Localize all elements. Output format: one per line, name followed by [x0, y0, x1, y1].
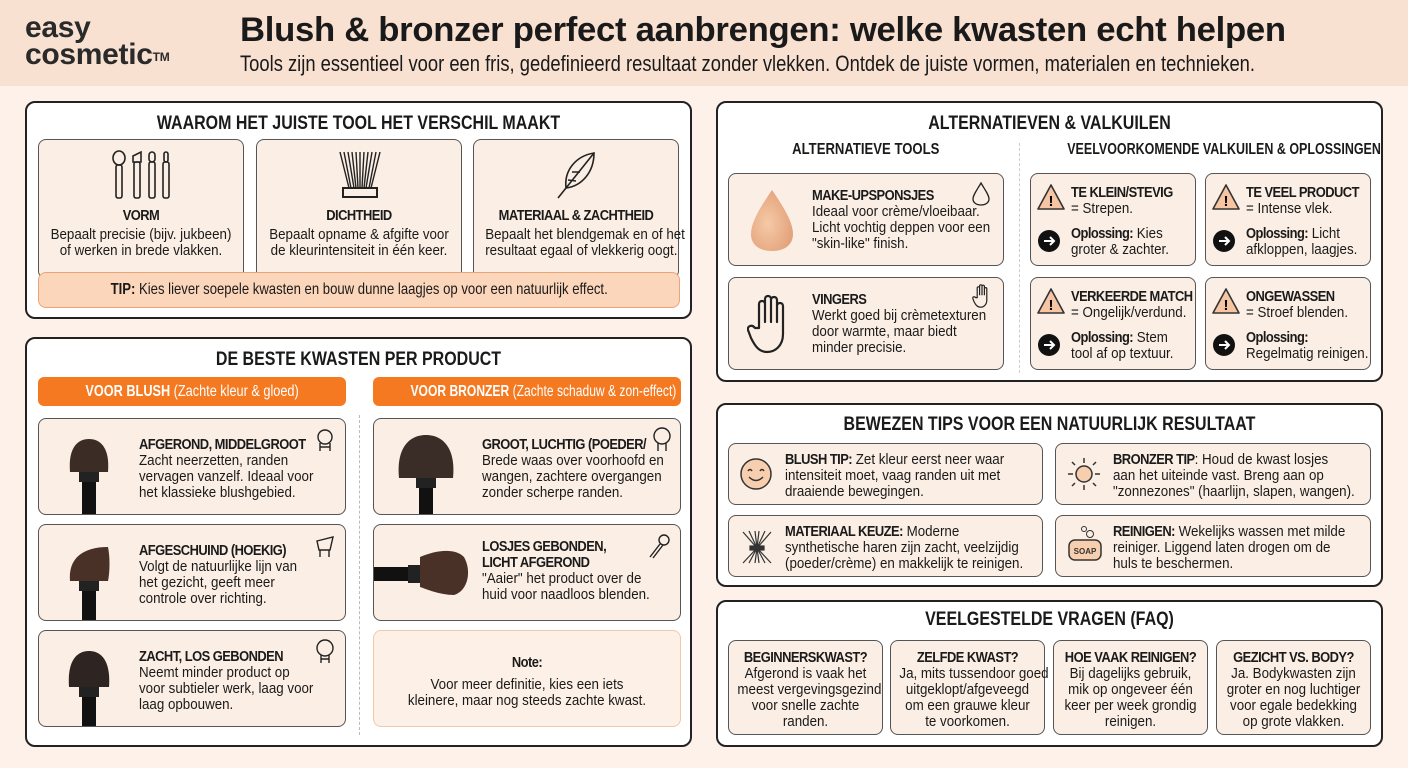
faq: gezicht vs body: voor egale bedekking: [1230, 697, 1357, 714]
faq: beginnerskwast: BEGINNERSKWAST?: [744, 650, 867, 666]
card: afgeschuind: Volgt de natuurlijke lijn van: [139, 558, 297, 575]
logo: cosmeticTM: [25, 38, 169, 71]
card: vingers: minder precisie.: [812, 339, 906, 356]
card: vorm: [38, 139, 244, 279]
faq: zelfde kwast: uitgeklopt/afgeveegd: [906, 681, 1029, 698]
card: make-upsponsjes: MAKE-UPSPONSJES: [812, 188, 934, 204]
card: groot luchtig: GROOT, LUCHTIG (POEDER/: [482, 437, 646, 453]
faq: zelfde kwast: ZELFDE KWAST?: [917, 650, 1018, 666]
subheading: valkuilen: VEELVOORKOMENDE VALKUILEN & OPLOSSINGEN: [1067, 141, 1381, 158]
card: afgeschuind: het gezicht, geeft meer: [139, 574, 275, 591]
card: afgerond middelgroot: vervagen vanzelf. Ideaal voor: [139, 468, 313, 485]
card: make-upsponsjes: Ideaal voor crème/vloeibaar.: [812, 203, 980, 220]
card: ongewassen: ONGEWASSEN: [1246, 289, 1335, 305]
card: dichtheid: DICHTHEID: [326, 208, 392, 224]
note: Note:: [512, 655, 542, 671]
subtitle: Tools zijn essentieel voor een fris, gedefinieerd resultaat zonder vlekken. Ontdek de juiste vormen, materialen en technieken.: [240, 51, 1255, 76]
faq: hoe vaak reinigen: mik op ongeveer één: [1068, 681, 1193, 698]
heading: ALTERNATIEVEN & VALKUILEN: [928, 112, 1171, 134]
card: reinigen: REINIGEN: Wekelijks wassen met milde: [1113, 523, 1345, 540]
card: materiaal: MATERIAAL & ZACHTHEID: [499, 208, 653, 224]
card: vingers: [728, 277, 1004, 370]
panel: faq: [716, 600, 1383, 747]
card: dichtheid: Bepaalt opname & afgifte voor: [269, 226, 449, 243]
card: te klein/stevig: Oplossing: Kies: [1071, 225, 1163, 242]
header band: [0, 0, 1408, 86]
faq: hoe vaak reinigen: keer per week grondig: [1064, 697, 1197, 714]
logo: [25, 11, 169, 71]
card: blush tip: intensiteit moet, vaag randen uit met: [785, 467, 1000, 484]
card: losjes gebonden: LOSJES GEBONDEN,: [482, 539, 606, 555]
card: afgeschuind: [38, 524, 346, 621]
card: te veel product: [1205, 173, 1371, 266]
faq: gezicht vs body: op grote vlakken.: [1243, 713, 1344, 730]
card: make-upsponsjes: Licht vochtig deppen voor een: [812, 219, 990, 236]
card: materiaal keuze: MATERIAAL KEUZE: Moderne: [785, 523, 959, 540]
label: voor blush: [38, 377, 346, 406]
faq: beginnerskwast: randen.: [783, 713, 828, 730]
icon: dense bristles: [339, 152, 381, 198]
heading: WAAROM HET JUISTE TOOL HET VERSCHIL MAAKT: [157, 112, 560, 134]
card: dichtheid: [256, 139, 462, 279]
card: te veel product: afkloppen, laagjes.: [1246, 241, 1357, 258]
card: reinigen: huls te beschermen.: [1113, 555, 1233, 572]
icon: brushes: [112, 150, 170, 199]
card: afgerond middelgroot: het klassieke blushgebied.: [139, 484, 296, 501]
card: afgeschuind: controle over richting.: [139, 590, 267, 607]
faq: hoe vaak reinigen: Bij dagelijks gebruik,: [1070, 665, 1191, 682]
card: vorm: Bepaalt precisie (bijv. jukbeen): [51, 226, 231, 243]
card: zacht los gebonden: laag opbouwen.: [139, 696, 233, 713]
note: [373, 630, 681, 727]
card: groot luchtig: Brede waas over voorhoofd en: [482, 452, 664, 469]
card: verkeerde match: = Ongelijk/verdund.: [1071, 304, 1186, 321]
card: materiaal: resultaat egaal of vlekkerig oogt.: [485, 242, 677, 259]
card: materiaal: Bepaalt het blendgemak en of het: [485, 226, 685, 243]
card: bronzer tip: "zonnezones" (haarlijn, slapen, wangen).: [1113, 483, 1355, 500]
card: afgerond middelgroot: Zacht neerzetten, randen: [139, 452, 288, 469]
faq: gezicht vs body: Ja. Bodykwasten zijn: [1231, 665, 1356, 682]
card: ongewassen: [1205, 277, 1371, 370]
heading: DE BESTE KWASTEN PER PRODUCT: [216, 348, 501, 370]
note: Voor meer definitie, kies een iets: [431, 676, 623, 693]
icon: feather: [557, 152, 595, 198]
faq: hoe vaak reinigen: HOE VAAK REINIGEN?: [1065, 650, 1196, 666]
card: zacht los gebonden: [38, 630, 346, 727]
card: reinigen: [1055, 515, 1371, 577]
tip bar: [38, 272, 680, 308]
card: afgerond middelgroot: [38, 418, 346, 515]
card: te klein/stevig: !: [1048, 193, 1054, 210]
card: materiaal: [473, 139, 679, 279]
card: vingers: Werkt goed bij crèmetexturen: [812, 307, 986, 324]
card: materiaal keuze: synthetische haren zijn zacht, veelzijdig: [785, 539, 1019, 556]
card: verkeerde match: tool af op textuur.: [1071, 345, 1173, 362]
card: ongewassen: = Stroef blenden.: [1246, 304, 1348, 321]
faq: zelfde kwast: om een grauwe kleur: [905, 697, 1030, 714]
card: te klein/stevig: groter & zachter.: [1071, 241, 1169, 258]
faq: beginnerskwast: meest vergevingsgezind: [737, 681, 881, 698]
logo: easy: [25, 11, 91, 44]
title: Blush & bronzer perfect aanbrengen: welke kwasten echt helpen: [240, 11, 1286, 49]
faq: zelfde kwast: Ja, mits tussendoor goed: [899, 665, 1049, 682]
faq: zelfde kwast: [890, 640, 1045, 735]
panel: bewezen tips: [716, 403, 1383, 587]
card: ongewassen: !: [1224, 297, 1228, 314]
card: ongewassen: Oplossing:: [1246, 330, 1308, 346]
subheading: alternatieve tools: ALTERNATIEVE TOOLS: [792, 141, 939, 158]
faq: hoe vaak reinigen: [1053, 640, 1208, 735]
faq: hoe vaak reinigen: reinigen.: [1105, 713, 1156, 730]
icon: brush photo: [70, 439, 108, 514]
card: zacht los gebonden: voor subtieler werk, laag voor: [139, 680, 313, 697]
card: te veel product: = Intense vlek.: [1246, 200, 1332, 217]
faq: gezicht vs body: groter en nog luchtiger: [1227, 681, 1360, 698]
card: afgerond middelgroot: AFGEROND, MIDDELGROOT: [139, 437, 306, 453]
card: blush tip: [728, 443, 1043, 505]
card: blush tip: BLUSH TIP: Zet kleur eerst neer waar: [785, 451, 1004, 468]
card: verkeerde match: [1030, 277, 1196, 370]
card: zacht los gebonden: ZACHT, LOS GEBONDEN: [139, 649, 283, 665]
card: losjes gebonden: LICHT AFGEROND: [482, 555, 589, 571]
faq: zelfde kwast: te voorkomen.: [925, 713, 1010, 730]
card: vorm: VORM: [123, 208, 159, 224]
card: losjes gebonden: huid voor naadloos blenden.: [482, 586, 650, 603]
card: groot luchtig: wangen, zachtere overgangen: [482, 468, 662, 485]
tip bar: TIP: Kies liever soepele kwasten en bouw dunne laagjes op voor een natuurlijk effect.: [110, 281, 608, 298]
card: bronzer tip: aan het uiteinde vast. Breng aan op: [1113, 467, 1324, 484]
card: zacht los gebonden: Neemt minder product op: [139, 664, 290, 681]
faq: beginnerskwast: voor snelle zachte: [752, 697, 859, 714]
card: groot luchtig: zonder scherpe randen.: [482, 484, 623, 501]
card: reinigen: SOAP: [1074, 547, 1097, 556]
card: vingers: door warmte, maar biedt: [812, 323, 957, 340]
card: materiaal keuze: (poeder/crème) en makkelijk te reinigen.: [785, 555, 1023, 572]
card: reinigen: reiniger. Liggend laten drogen om de: [1113, 539, 1330, 556]
card: bronzer tip: [1055, 443, 1371, 505]
card: materiaal keuze: [728, 515, 1043, 577]
card: vingers: VINGERS: [812, 292, 866, 308]
faq: beginnerskwast: Afgerond is vaak het: [745, 665, 866, 682]
card: verkeerde match: VERKEERDE MATCH: [1071, 289, 1193, 305]
card: afgeschuind: AFGESCHUIND (HOEKIG): [139, 543, 286, 559]
card: te veel product: !: [1224, 193, 1228, 210]
card: dichtheid: de kleurintensiteit in één keer.: [271, 242, 447, 259]
card: groot luchtig: [373, 418, 681, 515]
card: vorm: of werken in brede vlakken.: [60, 242, 222, 259]
card: ongewassen: Regelmatig reinigen.: [1246, 345, 1368, 362]
label: voor bronzer: [373, 377, 681, 406]
heading: VEELGESTELDE VRAGEN (FAQ): [925, 608, 1174, 630]
card: losjes gebonden: [373, 524, 681, 621]
label: voor bronzer: VOOR BRONZER (Zachte schaduw & zon-effect): [410, 383, 676, 400]
card: losjes gebonden: "Aaier" het product over de: [482, 570, 641, 587]
card: bronzer tip: BRONZER TIP: Houd de kwast losjes: [1113, 451, 1328, 468]
faq: gezicht vs body: [1216, 640, 1371, 735]
card: te klein/stevig: TE KLEIN/STEVIG: [1071, 185, 1173, 201]
card: verkeerde match: !: [1048, 297, 1054, 314]
panel: waarom het juiste tool: [25, 101, 692, 319]
card: verkeerde match: Oplossing: Stem: [1071, 329, 1168, 346]
card: te veel product: TE VEEL PRODUCT: [1246, 185, 1359, 201]
panel: alternatieven & valkuilen: [716, 101, 1383, 382]
card: te klein/stevig: [1030, 173, 1196, 266]
card: make-upsponsjes: [728, 173, 1004, 266]
card: blush tip: draaiende bewegingen.: [785, 483, 924, 500]
panel: beste kwasten: [25, 337, 692, 747]
heading: BEWEZEN TIPS VOOR EEN NATUURLIJK RESULTAAT: [844, 413, 1255, 435]
note: kleinere, maar nog steeds zachte kwast.: [408, 692, 646, 709]
label: voor blush: VOOR BLUSH (Zachte kleur & gloed): [85, 383, 299, 400]
faq: gezicht vs body: GEZICHT VS. BODY?: [1233, 650, 1354, 666]
faq: beginnerskwast: [728, 640, 883, 735]
card: make-upsponsjes: "skin-like" finish.: [812, 235, 908, 252]
card: te veel product: Oplossing: Licht: [1246, 225, 1340, 242]
card: te klein/stevig: = Strepen.: [1071, 200, 1133, 217]
